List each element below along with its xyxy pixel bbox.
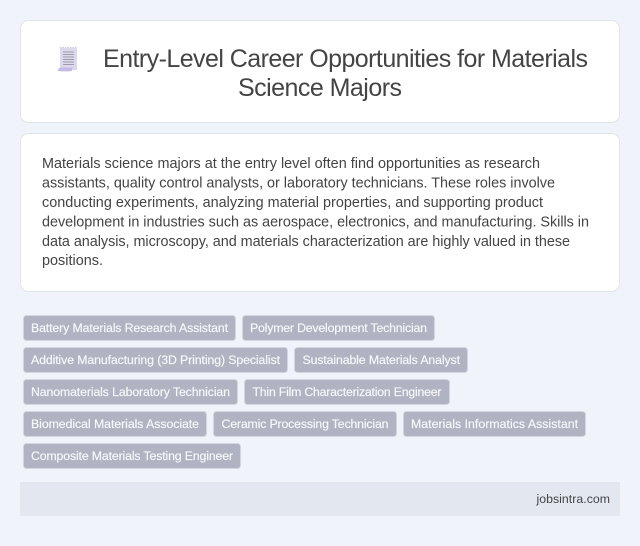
tag: Ceramic Processing Technician: Ceramic Processing Technician [222, 417, 389, 431]
tag: Additive Manufacturing (3D Printing) Specialist [24, 348, 288, 372]
footer bar [20, 482, 620, 516]
tag: Biomedical Materials Associate: Biomedical Materials Associate [31, 417, 199, 431]
tag: Thin Film Characterization Engineer [244, 380, 450, 404]
icon: document scroll [58, 48, 77, 71]
description text: conducting experiments, analyzing material properties, and supporting product [42, 195, 543, 211]
tag: Ceramic Processing Technician [214, 412, 396, 436]
tag: Materials Informatics Assistant: Materials Informatics Assistant [411, 417, 579, 431]
tag: Sustainable Materials Analyst: Sustainable Materials Analyst [302, 353, 461, 367]
tag: Composite Materials Testing Engineer: Composite Materials Testing Engineer [31, 449, 233, 463]
tag: Battery Materials Research Assistant [24, 316, 236, 340]
description text: data analysis, microscopy, and materials characterization are highly valued in these [42, 234, 570, 250]
title: Entry-Level Career Opportunities for Materials [103, 45, 588, 73]
description text: positions. [42, 253, 103, 269]
description text: assistants, quality control analysts, or laboratory technicians. These roles involve [42, 176, 555, 192]
tag: Nanomaterials Laboratory Technician [24, 380, 238, 404]
tag: Materials Informatics Assistant [404, 412, 586, 436]
tag: Nanomaterials Laboratory Technician: Nanomaterials Laboratory Technician [31, 385, 230, 399]
panel: description card [20, 134, 620, 292]
footer source text: jobsintra.com [536, 492, 610, 506]
tag: Thin Film Characterization Engineer: Thin Film Characterization Engineer [252, 385, 442, 399]
description text [42, 156, 589, 269]
tag: Composite Materials Testing Engineer [24, 444, 240, 468]
description text: Materials science majors at the entry level often find opportunities as research [42, 156, 540, 172]
tag: Polymer Development Technician [242, 316, 434, 340]
title: Science Majors [238, 74, 402, 102]
panel: header card [20, 20, 620, 122]
tag: Polymer Development Technician: Polymer Development Technician [250, 321, 427, 335]
description text: development in industries such as aerospace, electronics, and manufacturing. Skills in [42, 214, 589, 230]
title [103, 45, 588, 102]
tag: Battery Materials Research Assistant: Battery Materials Research Assistant [31, 321, 229, 335]
tag: Additive Manufacturing (3D Printing) Specialist: Additive Manufacturing (3D Printing) Specialist [31, 353, 281, 367]
tag: Sustainable Materials Analyst [294, 348, 468, 372]
tag: Biomedical Materials Associate [24, 412, 206, 436]
tag list [24, 316, 586, 468]
